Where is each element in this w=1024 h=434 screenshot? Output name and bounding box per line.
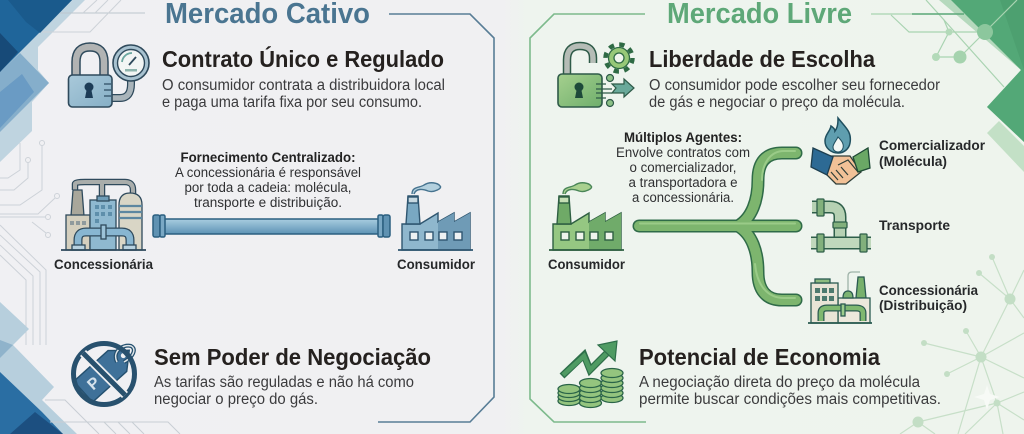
icon: concessionária plant <box>61 182 146 250</box>
text: Múltiplos Agentes: a transportadora e <box>628 175 738 190</box>
icon: transport pipes <box>811 199 871 252</box>
label: Concessionária (Distribuição) <box>879 283 978 313</box>
text: Fornecimento Centralizado: por toda a cadeia: molécula, <box>184 180 352 195</box>
icon: lock with gauge <box>68 45 149 107</box>
decoration: bottom-left blue geometric corner <box>0 302 180 434</box>
text: Fornecimento Centralizado <box>175 150 361 210</box>
decoration: top-right green geometric corner <box>871 0 1024 172</box>
text: Fornecimento Centralizado: transporte e distribuição. <box>194 195 342 210</box>
text: contrato description: e paga uma tarifa fixa por seu consumo. <box>162 94 422 111</box>
label: Concessionária: Concessionária <box>54 257 153 272</box>
icon: flame and handshake <box>811 118 870 184</box>
icon: distribution plant <box>808 272 872 323</box>
panel: Mercado Livre <box>530 0 986 422</box>
label: Comercializador (Molécula) <box>879 138 986 169</box>
text: Múltiplos Agentes: o comercializador, <box>630 160 736 175</box>
text: economia description <box>639 374 941 408</box>
text: negociação description <box>154 374 414 408</box>
label: Consumidor (cativo): Consumidor <box>397 257 476 272</box>
label: Concessionária (Distribuição): (Distribuição) <box>879 298 967 313</box>
text: liberdade description: de gás e negociar o preço da molécula. <box>649 94 905 111</box>
text: Fornecimento Centralizado: Fornecimento Centralizado: <box>180 150 356 165</box>
icon: consumer factory blue <box>398 183 473 250</box>
label: Concessionária (Distribuição): Concessionária <box>879 283 978 298</box>
arrow: blue supply pipe <box>153 215 390 237</box>
decoration: bottom-right network <box>900 254 1024 434</box>
icon: consumer factory green <box>549 183 624 250</box>
text: Múltiplos Agentes: Envolve contratos com <box>616 145 750 160</box>
label: Transporte: Transporte <box>879 218 950 233</box>
text: negociação description: negociar o preço do gás. <box>154 391 318 408</box>
text: economia description: permite buscar condições mais competitivas. <box>639 391 941 408</box>
heading: Sem Poder de Negociação: Sem Poder de Negociação <box>154 344 431 370</box>
heading: Potencial de Economia: Potencial de Economia <box>639 344 880 370</box>
text: Múltiplos Agentes <box>616 130 750 205</box>
label: Consumidor (livre): Consumidor <box>548 257 626 272</box>
icon: coins and rising arrow <box>558 341 623 408</box>
text: contrato description <box>162 77 445 111</box>
decoration: top-left blue geometric corner <box>0 0 145 345</box>
panel: Mercado Cativo <box>54 0 494 422</box>
heading: Contrato Único e Regulado: Contrato Único e Regulado <box>162 45 444 72</box>
text: contrato description: O consumidor contrata a distribuidora local <box>162 77 445 94</box>
label: Comercializador (Molécula): (Molécula) <box>879 154 947 169</box>
icon: no negotiation price tag <box>74 340 139 404</box>
text: liberdade description <box>649 77 940 111</box>
text: liberdade description: O consumidor pode escolher seu fornecedor <box>649 77 940 94</box>
arrow: branching green pipe <box>639 151 796 300</box>
text: economia description: A negociação direta do preço da molécula <box>639 374 920 391</box>
heading: Liberdade de Escolha: Liberdade de Escolha <box>649 46 875 72</box>
panel frame: left <box>378 14 494 422</box>
icon: no negotiation price tag: P <box>84 374 104 394</box>
panel frame: right <box>530 14 646 422</box>
text: negociação description: As tarifas são reguladas e não há como <box>154 374 414 391</box>
text: Fornecimento Centralizado: A concessionária é responsável <box>175 165 361 180</box>
text: Múltiplos Agentes: a concessionária. <box>632 190 734 205</box>
icon: open lock with gear and arrow <box>558 44 634 107</box>
text: Múltiplos Agentes: Múltiplos Agentes: <box>624 130 742 145</box>
label: Comercializador (Molécula): Comercializador <box>879 138 986 153</box>
